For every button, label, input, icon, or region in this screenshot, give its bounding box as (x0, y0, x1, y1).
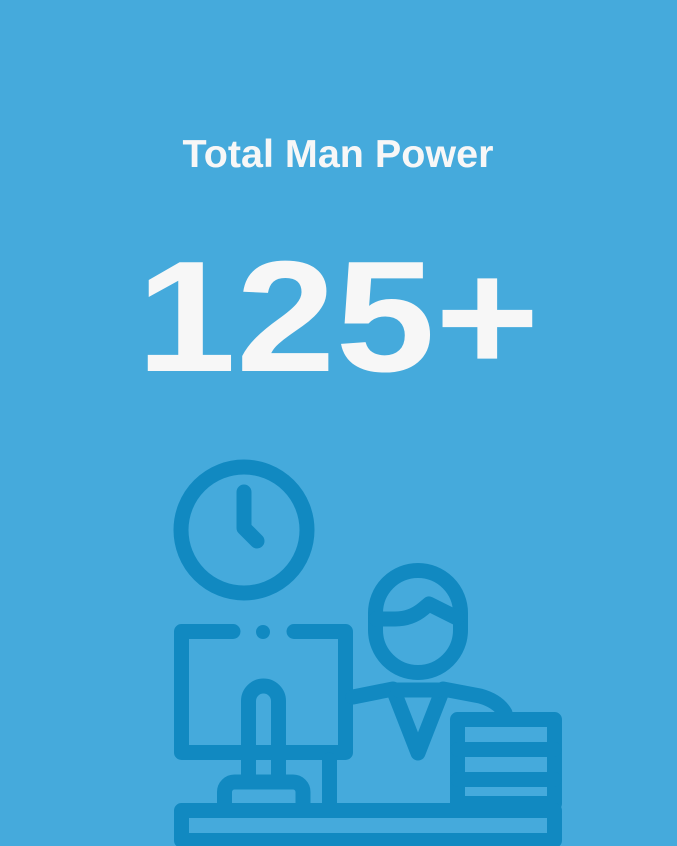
icon: desk (182, 810, 554, 840)
icon: book stack (458, 720, 554, 804)
big number: 125+ (136, 229, 540, 405)
icon: clock (181, 467, 307, 593)
icon: joystick (224, 686, 303, 803)
icon: office worker (181, 467, 554, 840)
title: Total Man Power (182, 133, 494, 176)
icon: monitor (182, 625, 346, 803)
icon: person (353, 570, 505, 753)
